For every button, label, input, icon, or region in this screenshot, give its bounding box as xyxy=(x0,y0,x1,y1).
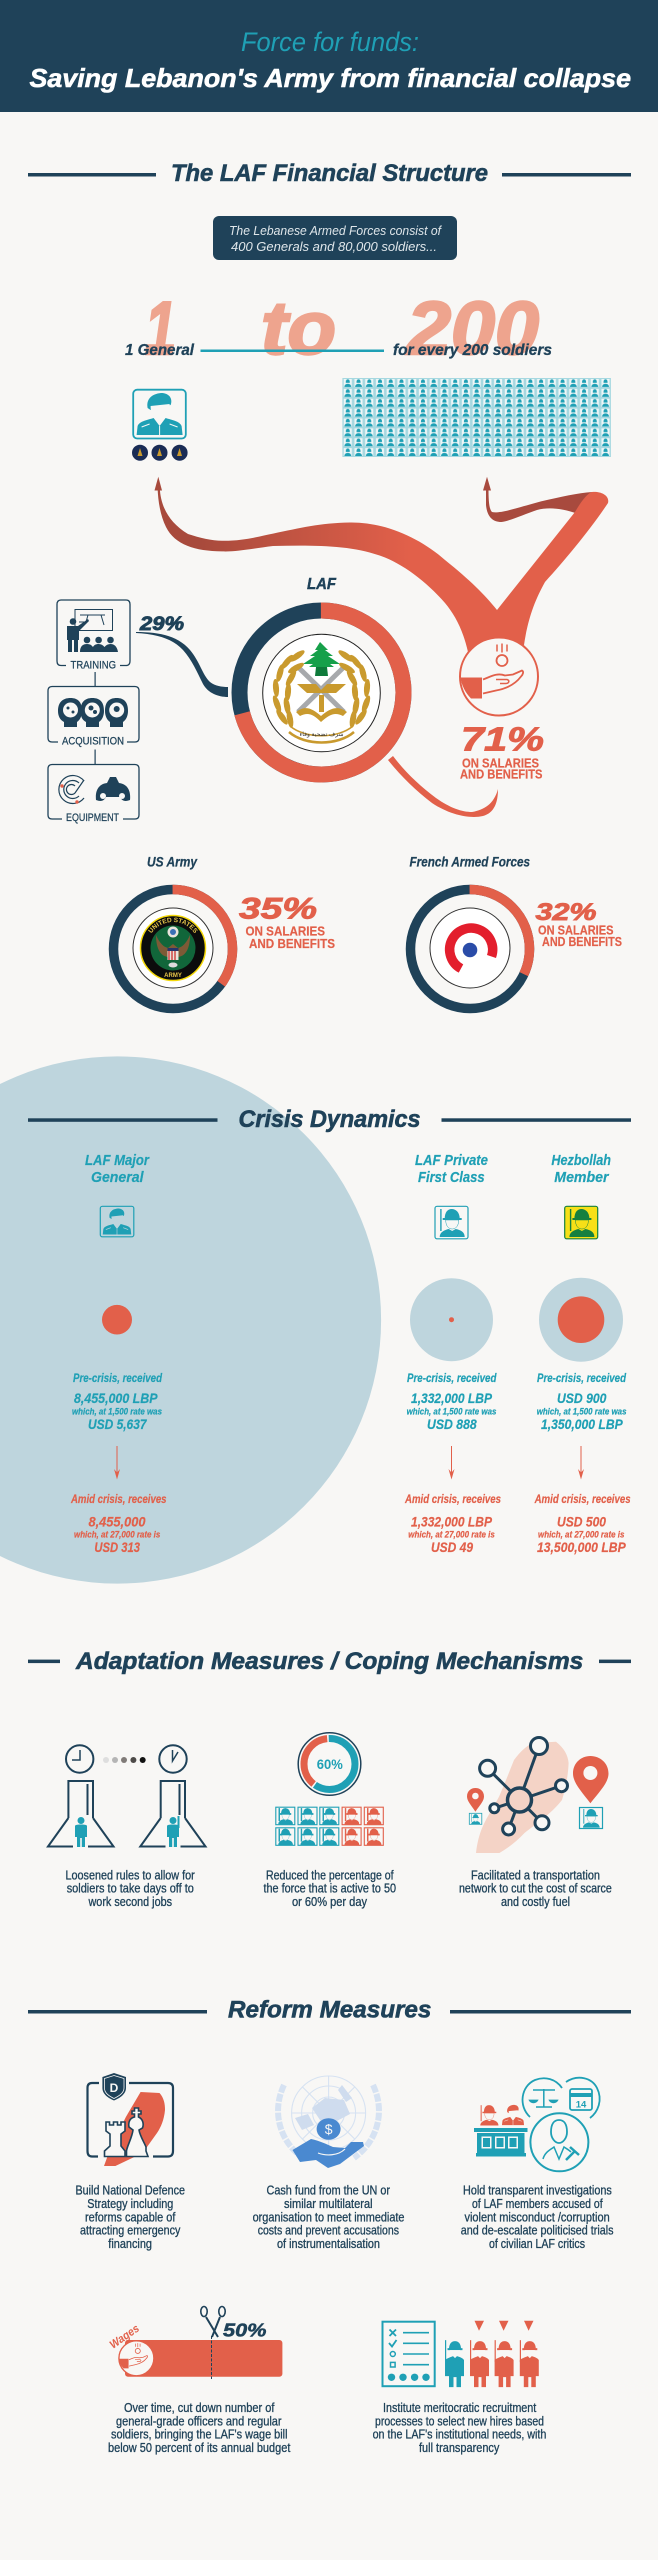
crisis figures: USD 500 xyxy=(557,1513,606,1529)
door one xyxy=(48,1781,114,1846)
column: LAF Private First Class xyxy=(404,1153,501,1555)
large pin xyxy=(573,1756,608,1803)
caption: defence strategy: attracting emergency xyxy=(80,2224,181,2238)
icon: hand receiving coin xyxy=(460,638,538,716)
crisis figures: USD 313 xyxy=(94,1539,140,1555)
connector xyxy=(94,750,96,764)
crisis figures: 1,332,000 LBP xyxy=(411,1513,493,1529)
emblem laurel right xyxy=(337,648,372,728)
wage scale circles xyxy=(410,1278,493,1361)
pre-crisis figures: which, at 1,500 rate was xyxy=(537,1407,626,1417)
crisis figures xyxy=(404,1492,501,1555)
icon grid: 200 soldiers xyxy=(342,378,611,457)
icon: transport network xyxy=(467,1738,608,1853)
caption: active force: or 60% per day xyxy=(292,1895,368,1909)
stat: 71% on salaries: ON SALARIES xyxy=(462,756,539,770)
caption: wage bill: Over time, cut down number of xyxy=(124,2401,275,2415)
caption: investigations: violent misconduct /corruption xyxy=(464,2210,610,2224)
icon: general xyxy=(133,390,186,438)
stat: 71% on salaries: AND BENEFITS xyxy=(460,768,542,782)
icon: UN cash fund: $ xyxy=(325,2121,333,2137)
caption: UN cash fund xyxy=(253,2184,405,2251)
pre-crisis figures: Pre-crisis, received xyxy=(537,1371,627,1385)
crisis figures: USD 49 xyxy=(431,1539,473,1555)
icon: defence strategy xyxy=(88,2073,173,2166)
icon: general rank medals xyxy=(132,445,188,461)
selection markers xyxy=(474,2321,534,2331)
icon: heads xyxy=(58,698,128,727)
crisis figures xyxy=(70,1492,167,1555)
ratio: 1 to 200: 1 xyxy=(145,286,176,370)
stat: 35% xyxy=(239,892,335,951)
tribunal soldiers xyxy=(480,2105,524,2126)
person two xyxy=(167,1816,180,1847)
caption: second jobs xyxy=(66,1868,195,1909)
emblem laurel left xyxy=(271,648,306,728)
pre-crisis figures: Pre-crisis, received xyxy=(73,1371,163,1385)
stat: 35%: 35% xyxy=(239,892,317,926)
caption: wage bill: soldiers, bringing the LAF's wage bill xyxy=(111,2428,288,2442)
arrow: ribbon to 200 soldiers xyxy=(483,477,592,522)
stat: 29%: 29% xyxy=(139,614,184,635)
crisis figures: Amid crisis, receives xyxy=(534,1492,631,1506)
soldier selected three xyxy=(520,2340,539,2387)
clock two xyxy=(159,1745,187,1773)
rook xyxy=(104,2122,125,2156)
column title xyxy=(85,1153,150,1186)
title line one: Force for funds: xyxy=(241,27,419,57)
stat: 32%: 32% xyxy=(536,899,596,926)
heading: The LAF Financial Structure: The LAF Financial Structure xyxy=(171,160,488,187)
caption: defence strategy: Strategy including xyxy=(87,2197,173,2211)
panel: training: TRAINING xyxy=(70,660,116,672)
pre-crisis figures xyxy=(537,1371,627,1432)
caption: defence strategy xyxy=(76,2184,185,2251)
panel: equipment xyxy=(48,764,139,824)
caption: second jobs: Loosened rules to allow for xyxy=(66,1868,195,1882)
icon: radar xyxy=(59,776,84,804)
column title: Member xyxy=(554,1170,610,1186)
column title: General xyxy=(91,1170,144,1186)
caption: UN cash fund: Cash fund from the UN or xyxy=(266,2184,390,2198)
emblem: Lebanese Armed Forces xyxy=(263,634,380,752)
pre-crisis figures: which, at 1,500 rate was xyxy=(407,1407,496,1417)
icon: trainer xyxy=(67,618,89,652)
icon: wage bill cut xyxy=(108,2306,282,2379)
shield: D xyxy=(110,2081,119,2095)
clock one xyxy=(66,1745,93,1773)
chart: 60% active ring xyxy=(298,1733,361,1795)
icon: whiteboard xyxy=(75,610,112,630)
caption: investigations xyxy=(461,2184,614,2251)
emblem: US Army seal: ARMY xyxy=(164,973,182,979)
arrow down xyxy=(114,1446,120,1480)
hand xyxy=(292,2139,364,2168)
map of Lebanon xyxy=(476,1742,569,1853)
ratio: 1 to 200: for every 200 soldiers xyxy=(393,342,552,359)
icon grid: soldiers on duty xyxy=(276,1807,383,1845)
icon: major general xyxy=(100,1206,134,1237)
intro callout xyxy=(213,216,457,260)
heading: French Armed Forces: French Armed Forces xyxy=(410,854,530,870)
stat: 35%: ON SALARIES xyxy=(246,924,325,938)
pre-crisis figures: 1,332,000 LBP xyxy=(411,1390,493,1406)
emblem: French roundel xyxy=(430,908,510,988)
heading: Reform Measures: Reform Measures xyxy=(228,1996,431,2023)
map of Lebanon xyxy=(104,2092,165,2166)
caption: recruitment: on the LAF's institutional needs, with xyxy=(373,2428,546,2442)
column title xyxy=(415,1153,488,1186)
caption: second jobs: soldiers to take days off to xyxy=(67,1882,194,1896)
small pin xyxy=(467,1788,484,1812)
scissors xyxy=(201,2306,225,2337)
large soldier tag xyxy=(580,1808,602,1828)
stat: 32%: ON SALARIES xyxy=(538,924,614,938)
crisis figures: Amid crisis, receives xyxy=(70,1492,167,1506)
column title: LAF Private xyxy=(415,1153,488,1169)
pre-crisis figures xyxy=(72,1371,163,1432)
caption: recruitment: full transparency xyxy=(419,2441,500,2455)
chart: 60% active ring: 60% xyxy=(317,1756,343,1772)
column title: LAF Major xyxy=(85,1153,150,1169)
crisis figures: 8,455,000 xyxy=(88,1513,146,1529)
icon: armoured vehicle xyxy=(96,777,130,801)
column: LAF Major General xyxy=(70,1153,167,1555)
connector xyxy=(94,672,96,686)
small soldier tag xyxy=(469,1813,482,1824)
icon: UN cash fund xyxy=(278,2076,379,2168)
panel: acquisition xyxy=(48,686,139,748)
caption: UN cash fund: similar multilateral xyxy=(284,2197,373,2211)
icon: private xyxy=(435,1206,468,1239)
intro callout: 400 Generals and 80,000 soldiers... xyxy=(231,239,437,254)
stat: 71% on salaries: 71% xyxy=(461,720,544,758)
label 50%: 50% xyxy=(223,2321,266,2341)
icon: investigations and trials xyxy=(474,2078,600,2171)
emblem banner: شرف تضحية وفاء xyxy=(299,731,344,738)
UN emblem xyxy=(278,2076,379,2158)
crisis figures: which, at 27,000 rate is xyxy=(408,1530,495,1540)
arrow down xyxy=(448,1446,454,1480)
icon: trainees xyxy=(80,637,118,652)
arrow: ribbon to general xyxy=(154,477,608,652)
crisis figures: Amid crisis, receives xyxy=(404,1492,501,1506)
column: Hezbollah Member xyxy=(534,1153,631,1555)
panel: training xyxy=(57,600,130,672)
caption: wage bill: general-grade officers and regular xyxy=(116,2414,282,2428)
caption: transport: Facilitated a transportation xyxy=(471,1868,600,1882)
crisis figures xyxy=(534,1492,631,1555)
caption: investigations: of LAF members accused of xyxy=(472,2197,603,2211)
caption: defence strategy: reforms capable of xyxy=(85,2210,176,2224)
icon: Hezbollah fighter xyxy=(565,1206,598,1239)
emblem: US Army seal: UNITED STATES xyxy=(148,918,198,933)
caption: defence strategy: financing xyxy=(108,2237,152,2251)
heading: LAF: LAF xyxy=(307,576,337,593)
donut chart: US Army 35% xyxy=(114,890,232,1008)
donut chart: French 32% xyxy=(410,890,530,1008)
wage dot xyxy=(102,1305,132,1334)
heading: US Army: US Army xyxy=(147,854,198,870)
pre-crisis figures: USD 5,637 xyxy=(88,1416,148,1432)
caption: defence strategy: Build National Defence xyxy=(76,2184,185,2198)
arrow down xyxy=(578,1446,584,1480)
label wages: Wages xyxy=(108,2323,142,2351)
stat: 32%: AND BENEFITS xyxy=(542,935,622,949)
heading: Crisis Dynamics: Crisis Dynamics xyxy=(238,1106,420,1133)
wage scale circles xyxy=(539,1278,623,1362)
person one xyxy=(75,1817,87,1847)
caption: UN cash fund: organisation to meet immediate xyxy=(253,2210,405,2224)
defendant and gavel xyxy=(530,2113,588,2171)
time dots xyxy=(103,1757,146,1763)
soldier teal xyxy=(445,2340,464,2387)
caption: active force: Reduced the percentage of xyxy=(266,1868,394,1882)
checklist xyxy=(382,2322,435,2386)
icon: clocks and doors xyxy=(48,1745,206,1847)
stat: 71% on salaries xyxy=(460,720,544,782)
ratio: 1 to 200: 200 xyxy=(405,286,539,370)
crisis figures: which, at 27,000 rate is xyxy=(538,1530,624,1540)
caption: recruitment xyxy=(373,2401,546,2455)
crisis figures: 13,500,000 LBP xyxy=(537,1539,626,1555)
wage bar xyxy=(125,2340,282,2377)
door two xyxy=(140,1781,206,1846)
stat: 32% xyxy=(536,899,622,949)
panel: equipment: EQUIPMENT xyxy=(66,812,119,824)
pre-crisis figures: 8,455,000 LBP xyxy=(74,1390,158,1406)
king xyxy=(126,2108,148,2156)
caption: second jobs: work second jobs xyxy=(88,1895,172,1909)
heading: Crisis Dynamics xyxy=(28,1106,631,1133)
calendar: 14 xyxy=(576,2100,587,2110)
column title: Hezbollah xyxy=(551,1153,611,1169)
caption: transport: network to cut the cost of scarce xyxy=(459,1882,612,1896)
pre-crisis figures: USD 888 xyxy=(427,1416,477,1432)
scale circle: general wage xyxy=(0,1056,381,1584)
arrow: curve to 29% slice xyxy=(136,632,228,697)
seal eagle xyxy=(156,926,190,968)
emblem cedar xyxy=(303,642,340,676)
caption: UN cash fund: of instrumentalisation xyxy=(277,2237,380,2251)
ratio: 1 to 200 xyxy=(125,286,552,370)
title line two: Saving Lebanon's Army from financial collapse xyxy=(30,63,631,93)
dashed cut line xyxy=(210,2336,212,2379)
emblem: US Army seal xyxy=(132,908,214,988)
soldier selected two xyxy=(495,2340,514,2387)
tribunal desk xyxy=(474,2128,528,2156)
caption: active force xyxy=(264,1868,396,1909)
scales of justice xyxy=(523,2078,562,2117)
heading: Adaptation Measures: Adaptation Measures / Coping Mechanisms xyxy=(75,1648,583,1675)
hand circle xyxy=(119,2341,154,2376)
column title: First Class xyxy=(418,1170,485,1186)
coin xyxy=(317,2118,341,2140)
caption: investigations: Hold transparent investigations xyxy=(463,2184,612,2198)
caption: transport: and costly fuel xyxy=(501,1895,570,1909)
icon: recruitment checklist xyxy=(382,2321,539,2387)
panel: acquisition: ACQUISITION xyxy=(62,736,124,748)
emblem swords and wings xyxy=(296,667,347,722)
caption: wage bill: below 50 percent of its annual budget xyxy=(108,2441,291,2455)
intro callout: The Lebanese Armed Forces consist of xyxy=(229,223,442,238)
caption: investigations: and de-escalate politicised trials xyxy=(461,2224,614,2238)
pre-crisis figures: 1,350,000 LBP xyxy=(541,1416,623,1432)
pre-crisis figures: which, at 1,500 rate was xyxy=(72,1407,162,1417)
caption: investigations: of civilian LAF critics xyxy=(489,2237,585,2251)
caption: recruitment: Institute meritocratic recruitment xyxy=(383,2401,537,2415)
ratio: 1 to 200: 1 General xyxy=(125,342,195,359)
network xyxy=(480,1738,568,1835)
heading: The LAF Financial Structure xyxy=(28,160,631,187)
frame xyxy=(88,2083,173,2156)
arrow: curl to salaries xyxy=(388,756,498,817)
soldier selected one xyxy=(470,2340,489,2387)
caption: transport xyxy=(459,1868,612,1909)
heading: Reform Measures xyxy=(28,1996,631,2023)
donut chart: LAF spending 71% xyxy=(240,610,404,774)
caption: recruitment: processes to select new hires based xyxy=(375,2414,544,2428)
pre-crisis figures xyxy=(407,1371,497,1432)
stat: 35%: AND BENEFITS xyxy=(249,936,335,951)
pre-crisis figures: USD 900 xyxy=(557,1390,607,1406)
column title xyxy=(551,1153,611,1186)
header banner xyxy=(0,0,658,112)
pre-crisis figures: Pre-crisis, received xyxy=(407,1371,497,1385)
caption: UN cash fund: costs and prevent accusations xyxy=(258,2224,399,2238)
caption: active force: the force that is active to 50 xyxy=(264,1882,396,1896)
ratio: 1 to 200: to xyxy=(261,286,336,370)
crisis figures: which, at 27,000 rate is xyxy=(74,1530,160,1540)
caption: wage bill xyxy=(108,2401,291,2455)
